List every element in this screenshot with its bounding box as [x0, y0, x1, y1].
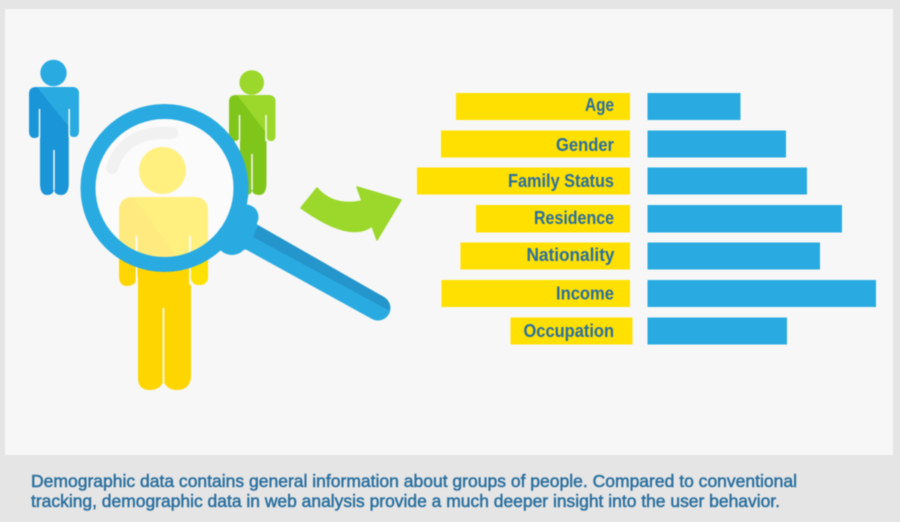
text block: footer description: [31, 471, 797, 511]
magnifier lens: [88, 112, 241, 264]
row: Nationality: [460, 242, 820, 270]
row: Gender: Gender: [556, 135, 614, 155]
magnifier handle: [251, 238, 378, 308]
row: Income: Income: [556, 284, 614, 304]
row: Family Status: [417, 168, 807, 194]
row: Income: [442, 280, 876, 307]
row: Age: Age: [585, 95, 614, 115]
bar chart: demographic attributes: [417, 93, 876, 344]
row: Occupation: [510, 318, 787, 344]
text block: footer description: Demographic data contains general information about groups of people. Compared to conventional: [31, 471, 797, 491]
row: Residence: [476, 205, 842, 232]
row: Nationality: Nationality: [526, 245, 614, 265]
magnifier hub: [216, 204, 258, 255]
row: Residence: Residence: [534, 208, 614, 228]
row: Age: [456, 93, 740, 120]
icon: magnifying glass: [88, 112, 390, 310]
icon: green person: [229, 70, 276, 195]
lens highlight: [112, 133, 172, 168]
icon: green curved arrow: [301, 187, 401, 240]
icon: yellow person: [119, 147, 208, 390]
magnifier handle shadow stripe: [253, 225, 390, 310]
icon: blue person: [29, 60, 79, 195]
row: Family Status: Family Status: [508, 171, 614, 191]
row: Gender: [441, 130, 786, 158]
text block: footer description: tracking, demographic data in web analysis provide a much deeper insight into the user behavior.: [31, 491, 780, 511]
row: Occupation: Occupation: [524, 321, 614, 341]
